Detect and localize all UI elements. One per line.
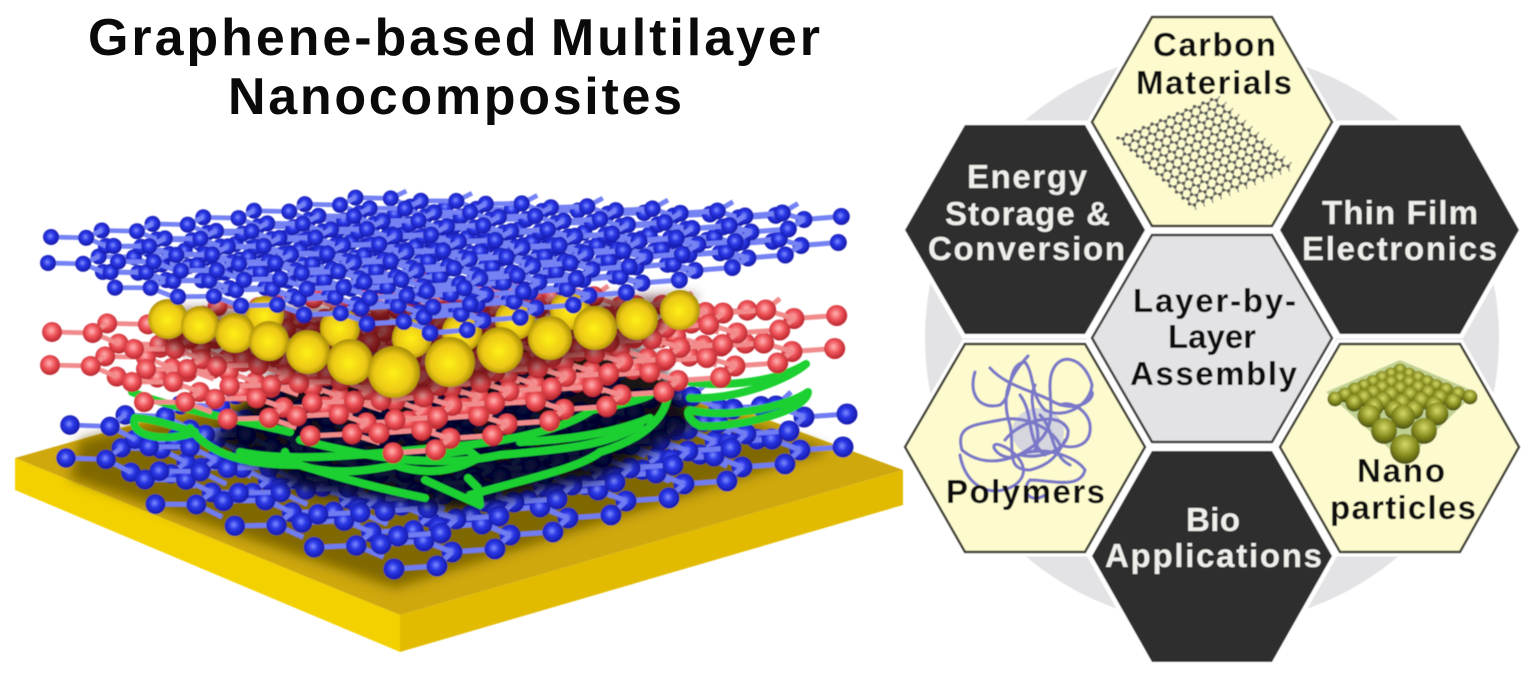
hexagon: Polymers: Polymers	[946, 473, 1105, 510]
hexagon: Layer-by-Layer Assembly: Layer	[1168, 318, 1256, 355]
bottom blue graphene bilayer	[54, 314, 857, 580]
hexagon diagram	[905, 17, 1519, 662]
hexagon: Bio Applications: Applications	[1105, 537, 1322, 574]
icon: graphene sheet	[1116, 96, 1292, 210]
hexagon: Carbon Materials: Carbon	[1153, 26, 1276, 63]
multilayer nanocomposite illustration	[15, 154, 903, 652]
gold substrate	[15, 320, 903, 652]
title: Nanocomposites	[228, 68, 682, 126]
hexagon: Energy Storage and Conversion	[905, 125, 1145, 334]
hexagon: Nano particles	[1280, 344, 1519, 552]
top blue graphene bilayer	[39, 154, 850, 342]
red graphene bilayer	[39, 235, 847, 464]
hexagon: Layer-by-Layer Assembly	[1092, 235, 1332, 442]
hexagon: Bio Applications	[1092, 451, 1332, 662]
hexagon: Polymers	[905, 344, 1145, 552]
hexagon: Thin Film Electronics	[1280, 125, 1519, 334]
hexagon: Thin Film Electronics: Electronics	[1302, 230, 1497, 267]
hexagon: Layer-by-Layer Assembly: Assembly	[1130, 355, 1298, 392]
icon: polymer tangle	[960, 356, 1092, 498]
icon: nanoparticle array	[1326, 360, 1478, 464]
hexagon: Nano particles: Nano	[1357, 452, 1445, 489]
shadow under nanoparticles	[160, 295, 700, 398]
hexagon: Nano particles: particles	[1330, 489, 1476, 526]
hexagon: Carbon Materials: Materials	[1136, 64, 1292, 101]
hexagon: Thin Film Electronics: Thin Film	[1322, 194, 1478, 231]
title	[88, 9, 820, 126]
hexagon: Carbon Materials	[1092, 17, 1332, 226]
hexagon: Layer-by-Layer Assembly: Layer-by-	[1133, 282, 1296, 319]
hexagon: Bio Applications: Bio	[1186, 501, 1240, 538]
gold nanoparticles	[148, 290, 700, 398]
title: Graphene-based Multilayer	[88, 9, 820, 67]
hexagon: Energy Storage and Conversion: Conversion	[928, 230, 1125, 267]
hexagon: Energy Storage and Conversion: Storage &	[945, 195, 1110, 232]
shadow under polymer layer	[210, 350, 700, 510]
background circle	[925, 51, 1499, 625]
hexagon: Energy Storage and Conversion: Energy	[967, 158, 1088, 195]
green polymer strands	[132, 364, 808, 505]
